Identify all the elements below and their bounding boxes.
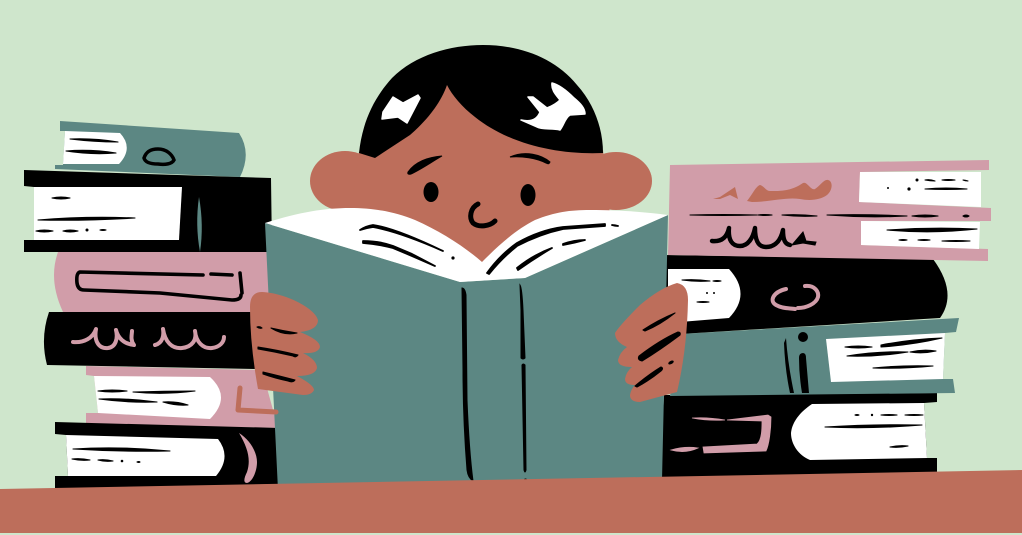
left stack: bottom black book bbox=[55, 422, 282, 489]
open book held by child bbox=[265, 208, 668, 490]
right stack: teal book bbox=[670, 318, 959, 396]
left stack: black book with white pages bbox=[24, 170, 272, 252]
left hand bbox=[250, 292, 320, 395]
left book stack bbox=[24, 121, 282, 489]
child head bbox=[310, 45, 652, 268]
right ear bbox=[580, 152, 652, 210]
nose bbox=[471, 204, 495, 226]
right hair highlight bbox=[521, 83, 585, 130]
left hair highlight bbox=[382, 95, 420, 123]
page text lines bbox=[360, 224, 618, 274]
left eyebrow bbox=[408, 156, 442, 174]
left ear bbox=[310, 151, 380, 211]
left eye bbox=[424, 182, 438, 202]
book cover bbox=[265, 215, 668, 490]
right eyebrow bbox=[510, 154, 550, 164]
left stack: pink book bbox=[54, 252, 272, 312]
right eye bbox=[520, 184, 536, 206]
hair bbox=[359, 45, 603, 158]
right stack: black book with white pages bbox=[664, 255, 948, 334]
skin-coloured mark on pink book bbox=[238, 388, 276, 412]
right stack: pink book on top bbox=[668, 160, 991, 261]
book pages bbox=[265, 208, 668, 282]
left stack: teal top book bbox=[55, 121, 246, 177]
face bbox=[350, 85, 610, 268]
right stack: bottom black book bbox=[660, 393, 937, 478]
right book stack bbox=[660, 160, 991, 478]
table bbox=[0, 470, 1022, 533]
left stack: black book with pink squiggle bbox=[44, 312, 258, 369]
right hand bbox=[615, 283, 688, 402]
book spine lines bbox=[462, 285, 527, 482]
left stack: pink book with white pages bbox=[86, 366, 278, 428]
